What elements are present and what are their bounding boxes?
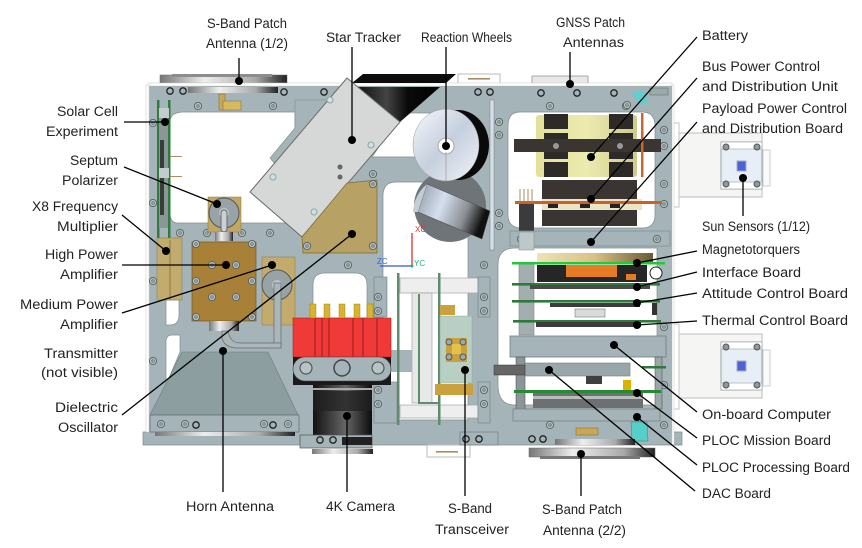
leader: Solar Cell Experiment	[124, 118, 169, 126]
axis triad: XC	[415, 225, 426, 234]
white strip	[148, 83, 672, 86]
label: Thermal Control Board: Thermal Control Board	[702, 313, 848, 328]
label: Medium Power Amplifier: Amplifier	[60, 317, 119, 332]
leader: Interface Board	[633, 272, 697, 291]
bottom S-band patch antenna	[529, 448, 655, 459]
leader: PLOC Processing Board	[633, 413, 697, 465]
label: Reaction Wheels: Reaction Wheels	[421, 30, 512, 45]
label: Attitude Control Board: Attitude Control Board	[702, 286, 848, 301]
label: Battery: Battery	[702, 28, 748, 43]
label: Star Tracker: Star Tracker	[326, 30, 402, 45]
leader: Thermal Control Board	[633, 321, 697, 329]
leader: Medium Power Amplifier	[122, 261, 276, 313]
medium power amplifier	[262, 257, 295, 325]
label: High Power Amplifier: High Power	[45, 247, 119, 262]
label: S-Band Patch Antenna 2/2: Antenna (2/2)	[543, 523, 626, 538]
leader: PLOC Mission Board	[633, 389, 697, 438]
label: Medium Power Amplifier: Medium Power	[20, 297, 119, 312]
label: GNSS Patch Antennas	[556, 15, 625, 50]
label: Solar Cell Experiment: Solar Cell	[57, 104, 118, 119]
star tracker hood	[352, 74, 456, 122]
thermal control board	[513, 320, 661, 327]
frame edge right	[672, 85, 674, 445]
label: Bus Power Control and Distribution Unit: Bus Power Control	[702, 59, 820, 74]
sun sensor upper	[672, 123, 770, 207]
label: Horn Antenna: Horn Antenna	[186, 499, 275, 514]
transceiver assembly frame	[374, 273, 490, 425]
leader: Attitude Control Board	[633, 293, 697, 307]
label: DAC Board: DAC Board	[702, 486, 771, 501]
bottom white fixture	[427, 445, 470, 457]
X8 frequency multiplier	[157, 238, 182, 300]
septum polarizer	[208, 197, 241, 241]
reaction wheel 1	[413, 109, 489, 181]
label: S-Band Patch Antenna 1/2: Antenna (1/2)	[206, 36, 288, 51]
leader: Magnetotorquers	[633, 251, 697, 267]
leader: S-Band Transceiver	[461, 366, 469, 496]
label: PLOC Mission Board: PLOC Mission Board	[702, 433, 831, 448]
battery	[514, 113, 661, 177]
label: On-board Computer: On-board Computer	[702, 407, 832, 422]
leader: Bus Power Control	[587, 78, 697, 203]
label: Payload Power Control and Distribution Board: and Distribution Board	[702, 121, 843, 136]
label: S-Band Patch Antenna 2/2	[542, 502, 626, 538]
label: 4K Camera: 4K Camera	[326, 499, 395, 514]
leader: Dielectric Oscillator	[122, 230, 356, 415]
leader: DAC Board	[545, 366, 695, 491]
wheel side rail	[490, 100, 503, 250]
label: Magnetotorquers: Magnetotorquers	[702, 242, 800, 257]
label: S-Band Patch Antenna 1/2	[206, 16, 288, 51]
axis triad: ZC	[377, 257, 388, 266]
frame edge	[146, 85, 149, 432]
cyan connector top	[623, 88, 668, 109]
GNSS patch antennas	[458, 74, 588, 84]
label: Sun Sensors: Sun Sensors (1/12)	[702, 219, 810, 234]
label: Septum Polarizer: Polarizer	[62, 173, 119, 188]
star tracker body	[250, 78, 400, 237]
interface board	[512, 283, 660, 289]
label: Payload Power Control and Distribution Board: Payload Power Control	[702, 101, 847, 116]
reaction wheel 2	[413, 170, 490, 242]
leader: Septum Polarizer	[124, 167, 221, 208]
label: Payload Power Control and Distribution Board	[702, 101, 847, 136]
bus power control and distribution unit	[515, 180, 662, 232]
brass fitting top	[219, 94, 241, 110]
label: Septum Polarizer: Septum	[70, 153, 118, 168]
label: Dielectric Oscillator: Dielectric	[55, 400, 118, 415]
label: X8 Frequency Multiplier	[32, 199, 119, 234]
leader: Star Tracker	[348, 47, 356, 144]
label: Transmitter (not visible)	[41, 346, 119, 380]
bus frame	[143, 86, 682, 445]
label: Septum Polarizer	[62, 153, 119, 188]
label: X8 Frequency Multiplier: X8 Frequency	[32, 199, 118, 214]
label: GNSS Patch Antennas: Antennas	[563, 35, 624, 50]
PLOC mission board	[514, 390, 661, 408]
leader: On-board Computer	[610, 341, 697, 412]
star tracker support	[302, 170, 377, 253]
4K camera	[293, 304, 391, 454]
label: PLOC Processing Board: PLOC Processing Board	[702, 460, 850, 475]
cyan connector bottom	[631, 422, 648, 441]
leader: Sun Sensors	[739, 174, 747, 216]
label: Transmitter (not visible): Transmitter	[44, 346, 119, 361]
top S-band patch antenna	[160, 74, 287, 84]
horn antenna	[150, 352, 299, 436]
magnetotorquer	[512, 253, 665, 282]
bottom holes	[463, 436, 546, 442]
attitude control board	[512, 300, 660, 317]
leader: 4K Camera	[343, 412, 351, 492]
label: Solar Cell Experiment: Experiment	[46, 124, 118, 139]
bottom mounts	[460, 432, 498, 445]
high power amplifier	[192, 240, 256, 331]
label: S-Band Patch Antenna 2/2: S-Band Patch	[542, 502, 622, 517]
label: Dielectric Oscillator	[55, 400, 119, 435]
on-board computer	[510, 336, 666, 410]
leader: Battery	[587, 37, 697, 161]
leader: High Power Amplifier	[122, 261, 230, 269]
connector column	[519, 232, 534, 335]
label: Dielectric Oscillator: Oscillator	[58, 420, 119, 435]
label: Interface Board: Interface Board	[702, 265, 801, 280]
sun sensor lower	[672, 324, 770, 409]
payload power control board bar	[510, 231, 670, 246]
waveguide	[222, 283, 281, 348]
label: S-Band Transceiver: S-Band	[448, 501, 492, 516]
leader: Reaction Wheels	[442, 47, 450, 150]
bottom brass fitting	[555, 428, 635, 445]
label: High Power Amplifier: Amplifier	[60, 267, 119, 282]
leader: Payload Power Control	[587, 122, 697, 246]
leader: S-Band Patch Antenna 2/2	[577, 450, 585, 496]
bracket along star tracker	[270, 100, 335, 170]
leader: S-Band Patch Antenna 1/2	[235, 58, 243, 85]
label: Medium Power Amplifier	[20, 297, 119, 332]
label: Solar Cell Experiment	[46, 104, 118, 139]
label: X8 Frequency Multiplier: Multiplier	[57, 219, 119, 234]
S-band transceiver	[435, 305, 473, 395]
satellite CAD view	[143, 74, 770, 459]
leader: GNSS Patch Antennas	[566, 52, 574, 88]
DAC board	[513, 409, 660, 421]
axis triad: YC	[414, 259, 425, 268]
leader: Horn Antenna	[219, 347, 227, 492]
label: Bus Power Control and Distribution Unit	[702, 59, 838, 94]
axis triad	[377, 225, 426, 268]
label: High Power Amplifier	[45, 247, 119, 282]
label: S-Band Transceiver: Transceiver	[435, 522, 510, 537]
label: S-Band Patch Antenna 1/2: S-Band Patch	[207, 16, 287, 31]
label: Transmitter (not visible): (not visible)	[41, 365, 118, 380]
frame screws	[149, 88, 668, 429]
leader: X8 Frequency Multiplier	[122, 215, 170, 255]
label: GNSS Patch Antennas: GNSS Patch	[556, 15, 625, 30]
label: S-Band Transceiver	[435, 501, 510, 537]
label: Bus Power Control and Distribution Unit: and Distribution Unit	[702, 79, 838, 94]
solar cell experiment boards	[157, 100, 182, 238]
strip gradient top	[188, 87, 278, 93]
PLOC processing board	[494, 363, 631, 390]
